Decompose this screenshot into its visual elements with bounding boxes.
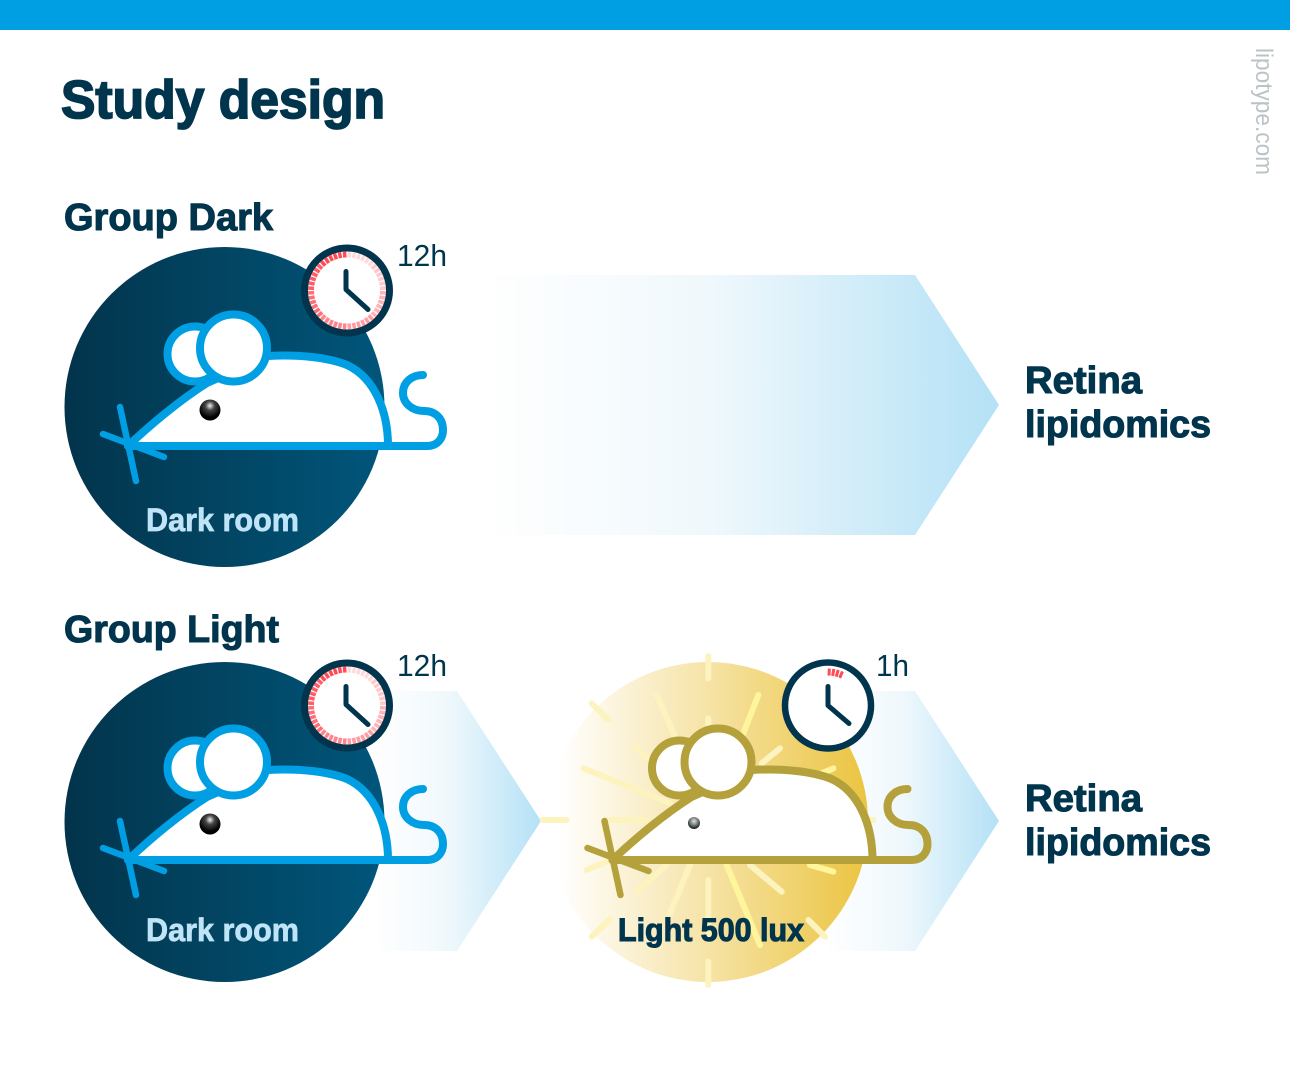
light circle: [548, 662, 868, 982]
heading: group light: Group Light: [64, 609, 279, 651]
title: Study design: [61, 70, 385, 130]
dark room circle: [64, 247, 384, 567]
dark room circle: [64, 662, 384, 982]
panel: retina lipidomics, dark group: lipidomics: [1025, 404, 1211, 446]
panel: retina lipidomics, light group: lipidomics: [1025, 822, 1211, 864]
heading: group dark: Group Dark: [64, 197, 274, 239]
icon: 12 hour clock: [304, 663, 390, 748]
label: dark room: Dark room: [146, 912, 299, 948]
top bar: [0, 0, 1290, 30]
icon: mouse eye: [200, 814, 220, 834]
label: light 500 lux: Light 500 lux: [618, 912, 804, 948]
panel: retina lipidomics, light group: Retina: [1025, 778, 1143, 820]
icon: 12 hour clock: [304, 248, 390, 333]
icon: mouse: [588, 728, 928, 895]
icon: mouse eye: [200, 400, 220, 420]
icon: mouse: [103, 314, 443, 481]
icon: 1 hour clock: [785, 662, 871, 748]
label: 12h: 12h: [397, 238, 447, 273]
panel: retina lipidomics, dark group: Retina: [1025, 360, 1143, 402]
arrow: light to retina lipidomics: [825, 691, 999, 951]
website label: lipotype.com: [1250, 48, 1277, 175]
light rays: [543, 656, 873, 985]
arrow: dark room to light: [375, 691, 541, 951]
icon: mouse eye: [688, 817, 700, 829]
arrow: dark to retina lipidomics: [470, 275, 999, 535]
icon: mouse: [103, 728, 443, 895]
panel: group dark: [64, 197, 999, 567]
label: 12h: 12h: [397, 648, 447, 683]
label: 1h: 1h: [876, 648, 909, 683]
panel: group light: [64, 609, 999, 985]
label: dark room: Dark room: [146, 502, 299, 538]
